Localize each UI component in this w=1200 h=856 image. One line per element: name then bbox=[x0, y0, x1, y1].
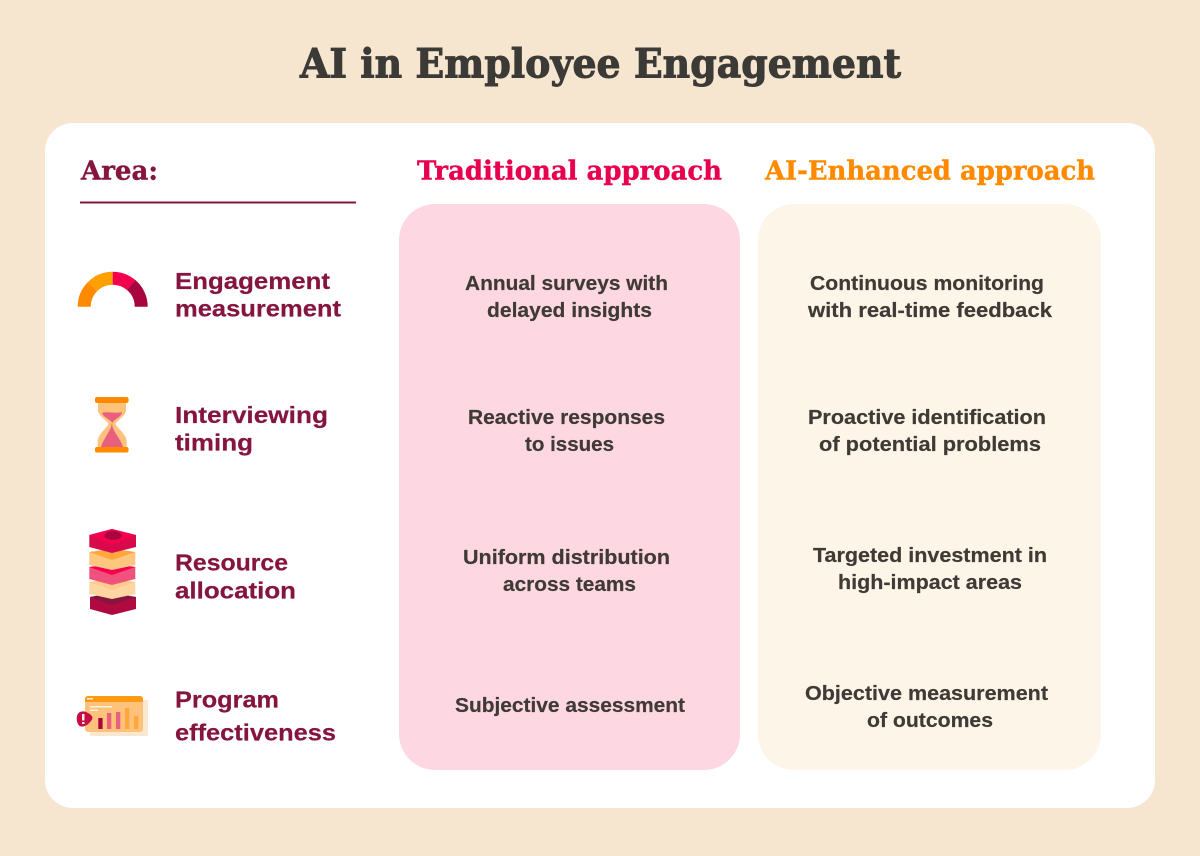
text: reactive responses bbox=[468, 407, 665, 456]
icon: dashboard with alert bbox=[77, 696, 148, 736]
text: continuous monitoring: with real-time feedback bbox=[807, 300, 1053, 322]
panel: traditional approach column bbox=[399, 204, 740, 770]
label: program effectiveness: Program bbox=[175, 686, 279, 712]
panel: white card bbox=[45, 123, 1155, 808]
icon: hourglass bbox=[95, 397, 128, 452]
text: annual surveys: Annual surveys with bbox=[465, 273, 668, 295]
text: targeted investment: high-impact areas bbox=[838, 572, 1022, 594]
text: proactive identification: Proactive identification bbox=[808, 407, 1046, 429]
text: targeted investment bbox=[813, 545, 1047, 594]
icon: resource stack bbox=[89, 529, 136, 615]
text: uniform distribution: across teams bbox=[503, 574, 636, 596]
label: interviewing timing: Interviewing bbox=[175, 402, 328, 428]
text: continuous monitoring bbox=[807, 273, 1053, 322]
text: targeted investment: Targeted investment in bbox=[813, 545, 1047, 567]
label: engagement measurement: measurement bbox=[175, 296, 341, 322]
text: reactive responses: to issues bbox=[525, 434, 614, 456]
text: subjective assessment: Subjective assessment bbox=[455, 695, 685, 717]
heading: traditional approach: Traditional approach bbox=[417, 156, 722, 186]
heading: area: Area: bbox=[80, 156, 158, 186]
text: continuous monitoring: Continuous monitoring bbox=[810, 273, 1044, 295]
text: uniform distribution: Uniform distribution bbox=[463, 547, 670, 569]
text: annual surveys bbox=[465, 273, 668, 322]
label: resource allocation: allocation bbox=[175, 578, 296, 604]
label: interviewing timing: timing bbox=[175, 430, 253, 456]
heading: AI-enhanced approach: AI-Enhanced approach bbox=[764, 156, 1095, 186]
text: proactive identification: of potential problems bbox=[819, 434, 1041, 456]
label: engagement measurement bbox=[175, 268, 341, 322]
label: interviewing timing bbox=[175, 402, 328, 456]
label: program effectiveness: effectiveness bbox=[175, 720, 336, 746]
label: program effectiveness bbox=[175, 686, 336, 746]
text: objective measurement: of outcomes bbox=[867, 710, 993, 732]
label: resource allocation: Resource bbox=[175, 550, 288, 576]
text: reactive responses: Reactive responses bbox=[468, 407, 665, 429]
text: objective measurement bbox=[805, 683, 1048, 732]
label: resource allocation bbox=[175, 550, 296, 604]
panel: AI-enhanced approach column bbox=[758, 204, 1101, 770]
label: engagement measurement: Engagement bbox=[175, 268, 330, 294]
text: annual surveys: delayed insights bbox=[487, 300, 652, 322]
text: proactive identification bbox=[808, 407, 1046, 456]
text: objective measurement: Objective measurement bbox=[805, 683, 1048, 705]
title: AI in Employee Engagement bbox=[299, 40, 901, 88]
text: uniform distribution bbox=[463, 547, 670, 596]
icon: gauge bbox=[78, 272, 148, 307]
